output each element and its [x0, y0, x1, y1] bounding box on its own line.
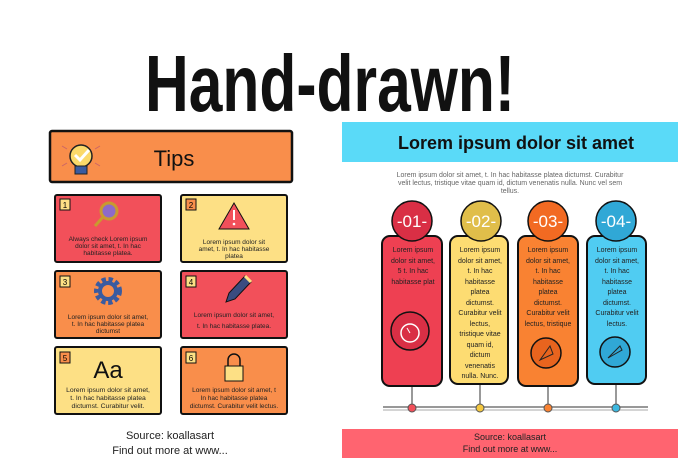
- card 2: Lorem ipsum dolor sit: [203, 239, 265, 246]
- pillar 02: [450, 201, 508, 412]
- pillar 02: tristique vitae: [459, 331, 501, 338]
- pillar 03: lectus, tristique: [525, 321, 571, 328]
- card 6: [181, 347, 287, 414]
- source left: [112, 430, 228, 457]
- intro text: [397, 172, 624, 195]
- card 1: [55, 195, 161, 262]
- tips header: Tips: [154, 146, 194, 171]
- card 1: 1: [63, 201, 68, 210]
- pillar 01: habitasse plat: [391, 279, 435, 286]
- pillar 02: dictum: [470, 352, 490, 359]
- card 5: Lorem ipsum dolor sit amet,: [66, 387, 150, 394]
- card 4: Lorem ipsum dolor sit amet,: [194, 312, 274, 319]
- pillar 03: t. In hac: [536, 268, 561, 275]
- pillar 03: platea: [538, 289, 558, 296]
- card 3: [55, 271, 161, 338]
- pillar 01: dolor sit amet,: [391, 258, 435, 265]
- pillar 02: lectus,: [470, 321, 490, 328]
- pillar 01: Lorem ipsum: [393, 247, 433, 254]
- card 2: 2: [189, 201, 194, 210]
- pillar 04: habitasse: [602, 279, 632, 286]
- pillar 03: habitasse: [533, 279, 563, 286]
- pillar 02: nulla. Nunc.: [462, 373, 499, 380]
- tips header: [50, 131, 292, 182]
- pillar 02: platea: [470, 289, 490, 296]
- pillar 03: -03-: [533, 212, 563, 231]
- pillar 04: Curabitur velit: [595, 310, 639, 317]
- intro text: tellus.: [501, 188, 519, 195]
- card 6: In hac habitasse platea: [201, 395, 268, 402]
- pillar 02: Lorem ipsum: [460, 247, 500, 254]
- panel: tips: [50, 131, 292, 457]
- card 3: t. In hac habitasse platea: [72, 321, 145, 328]
- card 2: [181, 195, 287, 262]
- pillar 01: 5 t. In hac: [398, 268, 429, 275]
- card 5: 5: [63, 354, 68, 363]
- blue header: [342, 122, 678, 162]
- card 6: Lorem ipsum dolor sit amet, t: [192, 387, 276, 394]
- card 3: Lorem ipsum dolor sit amet,: [68, 314, 148, 321]
- card 2: amet, t. In hac habitasse: [199, 246, 270, 253]
- pillar 02: Curabitur velit: [458, 310, 502, 317]
- pillar 02: quam id,: [467, 342, 493, 349]
- pillar 03: Lorem ipsum: [528, 247, 568, 254]
- source left: Find out more at www...: [112, 445, 228, 457]
- pillar 03: Curabitur velit: [526, 310, 570, 317]
- icon: lightbulb: [62, 145, 100, 174]
- panel: timeline: [342, 122, 678, 458]
- timeline line: [383, 407, 648, 410]
- pillar 04: lectus.: [607, 321, 627, 328]
- pillar 04: t. In hac: [605, 268, 630, 275]
- card 4: [181, 271, 287, 338]
- pillar 01: -01-: [397, 212, 427, 231]
- card 5: Aa: [93, 357, 123, 384]
- pillar 02: venenatis: [465, 363, 495, 370]
- pillar 03: [518, 201, 578, 412]
- pillar 01: [382, 201, 442, 412]
- card 6: 6: [189, 354, 194, 363]
- pillar 03: dictumst.: [534, 300, 562, 307]
- pillar 04: [587, 201, 646, 412]
- pillar 03: dolor sit amet,: [526, 258, 570, 265]
- pillar 04: dolor sit amet,: [595, 258, 639, 265]
- pillar 02: t. In hac: [468, 268, 493, 275]
- pillar 02: dolor sit amet,: [458, 258, 502, 265]
- pillar 04: dictumst.: [603, 300, 631, 307]
- title: Hand-drawn!: [145, 39, 515, 128]
- source bar: Find out more at www...: [463, 444, 557, 454]
- card 4: 4: [189, 278, 194, 287]
- source left: Source: koallasart: [126, 430, 214, 442]
- card 3: dictumst: [96, 328, 120, 335]
- intro text: Lorem ipsum dolor sit amet, t. In hac habitasse platea dictumst. Curabitur: [397, 172, 624, 179]
- card 4: t. In hac habitasse platea.: [197, 323, 271, 330]
- pillar 04: platea: [607, 289, 627, 296]
- card 3: 3: [63, 278, 68, 287]
- card 2: platea: [225, 253, 243, 260]
- pillar 04: -04-: [601, 212, 631, 231]
- pillar 02: -02-: [466, 212, 496, 231]
- card 5: [55, 347, 161, 414]
- card 5: t. In hac habitasse platea: [70, 395, 146, 402]
- blue header: Lorem ipsum dolor sit amet: [398, 133, 634, 153]
- source bar: Source: koallasart: [474, 432, 547, 442]
- pillar 04: Lorem ipsum: [597, 247, 637, 254]
- card 1: habitasse platea.: [83, 250, 133, 257]
- source bar: [342, 429, 678, 458]
- card 1: dolor sit amet, t. In hac: [75, 243, 142, 250]
- pillar 02: habitasse: [465, 279, 495, 286]
- card 6: dictumst. Curabitur velit lectus.: [190, 403, 278, 410]
- card 1: Always check Lorem ipsum: [69, 236, 147, 243]
- pillar 02: dictumst.: [466, 300, 494, 307]
- intro text: velit lectus, tristique vitae quam id, dictum venenatis nulla. Nunc vel sem: [398, 180, 622, 187]
- card 5: dictumst. Curabitur velit.: [72, 403, 145, 410]
